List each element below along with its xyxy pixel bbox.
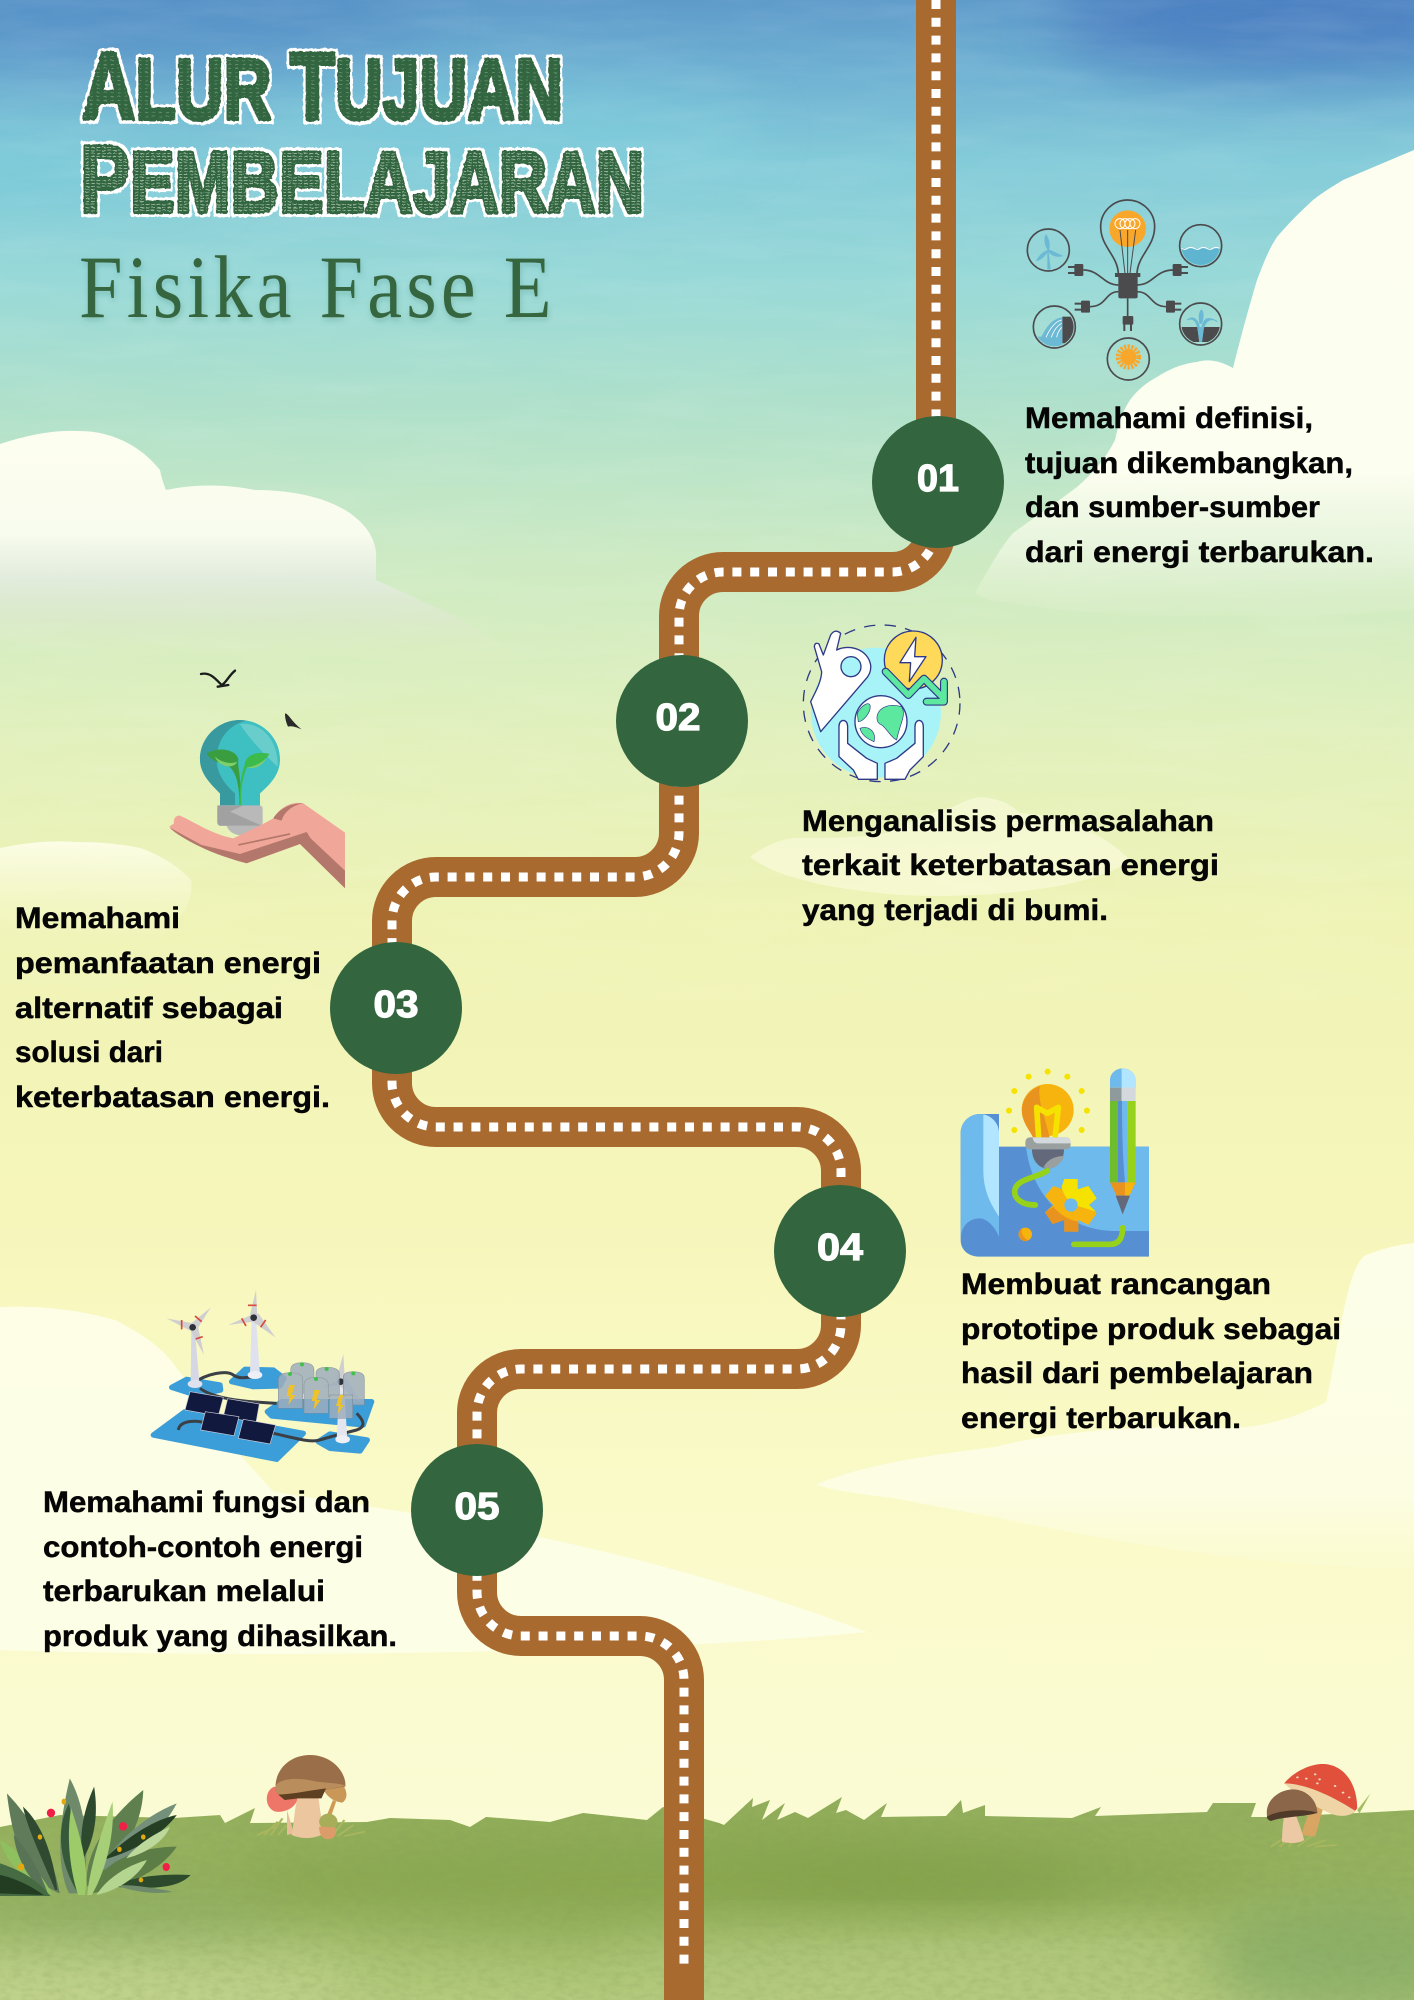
text: goal 03: Memahami <box>15 902 180 935</box>
step 04: 04 <box>817 1227 863 1269</box>
step 02 <box>616 655 748 787</box>
text: goal 02 <box>802 805 1219 927</box>
step 02: 02 <box>656 697 700 739</box>
text: goal 04: Membuat rancangan <box>961 1268 1271 1301</box>
text: goal 03 <box>15 902 330 1114</box>
winding road <box>392 0 936 2000</box>
title line 1: ALUR TUJUAN <box>82 33 563 140</box>
icon: earth with energy decline <box>803 625 960 782</box>
grass ground <box>0 1790 1414 2000</box>
text: goal 03: pemanfaatan energi <box>15 947 321 980</box>
icon: blueprint with bulb, gear and pencil <box>961 1068 1149 1257</box>
text: goal 01: tujuan dikembangkan, <box>1025 447 1353 480</box>
text: goal 02: Menganalisis permasalahan <box>802 805 1214 838</box>
step 05: 05 <box>454 1486 500 1528</box>
text: goal 05 <box>43 1486 397 1653</box>
text: goal 04: energi terbarukan. <box>961 1402 1241 1435</box>
text: goal 05: contoh-contoh energi <box>43 1531 363 1564</box>
icon: wind turbines, solar panels and batteries <box>153 1290 372 1459</box>
text: goal 04 <box>961 1268 1341 1435</box>
subtitle: Fisika Fase E <box>79 238 552 337</box>
cloud: faint middle <box>750 797 1130 896</box>
text: goal 03: keterbatasan energi. <box>15 1081 330 1114</box>
step 04 <box>774 1185 906 1317</box>
text: goal 03: solusi dari <box>15 1036 163 1069</box>
mushroom: brown cluster <box>257 1755 365 1839</box>
title line 2: PEMBELAJARAN <box>80 126 644 233</box>
cloud: middle left <box>0 841 192 963</box>
step 03: 03 <box>374 984 418 1026</box>
cloud: lower left <box>0 1307 867 1654</box>
cloud: top right <box>975 150 1414 617</box>
text: goal 04: prototipe produk sebagai <box>961 1313 1341 1346</box>
text: goal 03: alternatif sebagai <box>15 992 283 1025</box>
title <box>79 33 644 337</box>
text: goal 05: Memahami fungsi dan <box>43 1486 370 1519</box>
cloud: upper left <box>0 431 503 661</box>
text: goal 01 <box>1025 402 1374 569</box>
text: goal 05: terbarukan melalui <box>43 1575 325 1608</box>
cloud: lower right <box>816 1243 1414 1568</box>
step 03 <box>330 942 462 1074</box>
step 01: 01 <box>917 458 959 500</box>
step 05 <box>411 1444 543 1576</box>
text: goal 01: dari energi terbarukan. <box>1025 536 1374 569</box>
text: goal 02: terkait keterbatasan energi <box>802 849 1219 882</box>
step 01 <box>872 416 1004 548</box>
text: goal 01: Memahami definisi, <box>1025 402 1313 435</box>
plant: spiky bush with flowers <box>0 1778 191 1896</box>
mushroom: red cap <box>1267 1764 1370 1847</box>
text: goal 01: dan sumber-sumber <box>1025 491 1320 524</box>
text: goal 02: yang terjadi di bumi. <box>802 894 1108 927</box>
text: goal 05: produk yang dihasilkan. <box>43 1620 397 1653</box>
icon: bulb with sprout on hand and birds <box>169 671 345 888</box>
text: goal 04: hasil dari pembelajaran <box>961 1357 1313 1390</box>
icon: renewable energy bulb diagram <box>1027 200 1222 380</box>
